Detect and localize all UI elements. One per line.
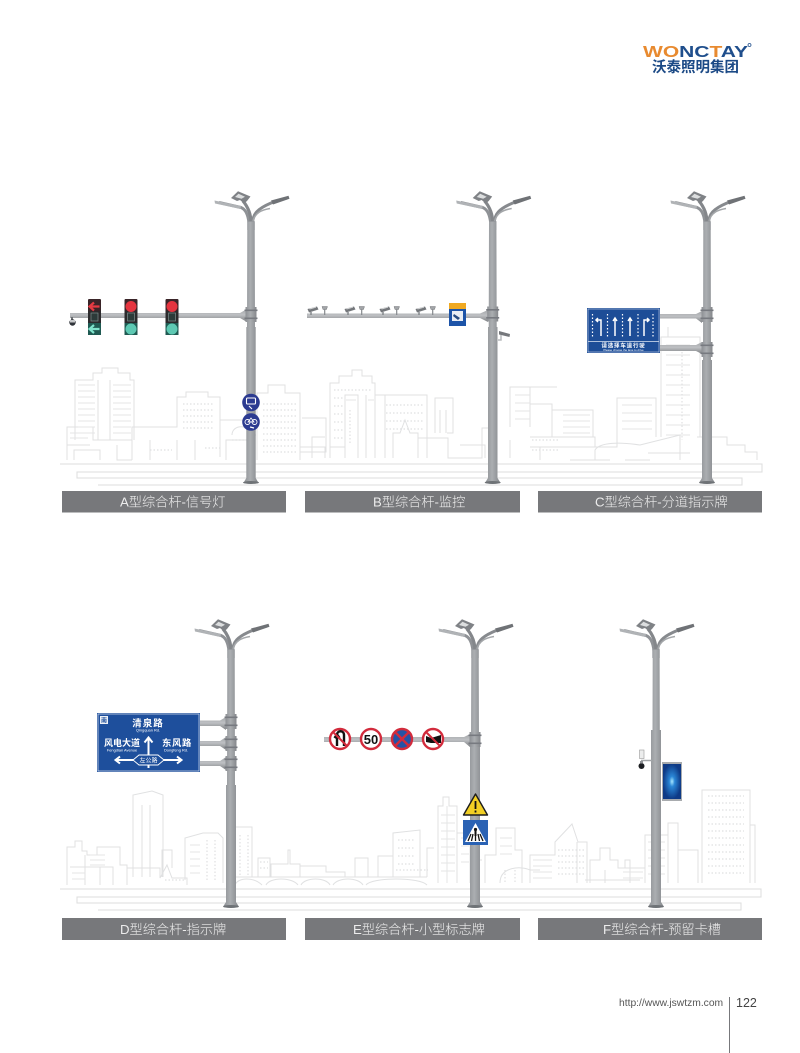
lamp head D [194, 619, 270, 658]
registered mark [748, 44, 751, 46]
collars C [700, 307, 714, 357]
cross arm A [70, 309, 247, 322]
sign caption English: Please choose the lane to drive [603, 348, 644, 352]
collar A [244, 307, 258, 322]
collar E [468, 732, 482, 747]
speed limit 50 sign: 50 [364, 732, 378, 747]
base B [485, 481, 501, 484]
base C [699, 481, 715, 484]
pole E [468, 650, 482, 906]
lamp head B [456, 191, 531, 230]
logo wordmark: WO NC TAY [643, 44, 748, 61]
road lines row 1 [60, 464, 762, 485]
road direction sign [97, 713, 200, 772]
bicycle lane sign [242, 413, 260, 431]
logo Chinese name: 沃泰照明集团 [652, 58, 739, 76]
pedestrian crossing sign [463, 820, 488, 845]
page number: 122 [736, 996, 757, 1010]
signal light 1 [88, 299, 101, 335]
base A [243, 481, 259, 484]
pole C [700, 222, 714, 482]
warning triangle sign [464, 794, 488, 815]
city skyline row 1 [67, 327, 757, 460]
caption E: E型综合杆-小型标志牌 [353, 922, 485, 937]
lower arm C [660, 342, 702, 354]
caption C: C型综合杆-分道指示牌 [595, 494, 728, 510]
cameras on arm [308, 306, 436, 315]
cross road plate: 左公路 [139, 756, 158, 764]
road direction sign: Qingquan Rd. [136, 728, 160, 732]
cross arm B [307, 310, 488, 322]
panel F: reserved slot pole [620, 619, 694, 908]
road direction sign: Fengdian Avenue [107, 748, 137, 752]
road lines row 2 [60, 889, 761, 910]
panel D: direction sign pole [97, 619, 270, 908]
no honking sign [423, 729, 443, 749]
pole F [648, 650, 664, 906]
caption A: A型综合杆-信号灯 [120, 494, 226, 510]
LED screen [662, 762, 682, 801]
speed limit 50 sign [361, 729, 381, 749]
direction arrows [116, 738, 182, 768]
destination Dongfeng: 东风路 [162, 737, 192, 748]
no stopping sign [392, 729, 412, 749]
collars D [224, 714, 238, 771]
caption F [538, 918, 762, 940]
lamp head F [620, 619, 694, 658]
road direction sign: Dongfeng Rd. [164, 748, 188, 752]
caption E [305, 918, 520, 940]
destination Fengdian: 风电大道 [104, 737, 140, 748]
caption D [62, 918, 286, 940]
no U-turn sign [330, 729, 350, 749]
brand logo [643, 44, 751, 76]
caption F: F型综合杆-预留卡槽 [603, 922, 721, 937]
bus lane sign [242, 394, 260, 411]
sign caption Chinese: 请选择车道行驶 [601, 342, 646, 350]
upper arm C [660, 311, 702, 323]
city skyline row 2 [67, 790, 755, 885]
north marker: 南 [101, 716, 107, 724]
footer divider [728, 997, 730, 1053]
camera A [69, 317, 76, 326]
camera bracket [638, 750, 652, 769]
caption A [62, 491, 286, 512]
pole D [224, 650, 238, 906]
destination Qingquan: 清泉路 [132, 718, 164, 730]
caption B [305, 491, 520, 512]
pole side camera [498, 331, 510, 340]
caption D: D型综合杆-指示牌 [120, 922, 226, 937]
caption C [538, 491, 762, 512]
base F [648, 905, 664, 908]
footer website url: http://www.jswtzm.com [619, 998, 723, 1009]
panel B: monitoring pole [307, 191, 531, 484]
cross arm E [324, 734, 470, 747]
lamp head A [214, 191, 290, 230]
lane arrows [596, 318, 649, 336]
pole B [486, 222, 500, 482]
collar B [486, 306, 499, 322]
lamp head E [438, 619, 514, 658]
monitoring notice sign [449, 303, 466, 326]
base D [223, 905, 239, 908]
panel E: small sign pole [324, 619, 514, 908]
caption B: B型综合杆-监控 [373, 494, 465, 510]
panel A: traffic signal pole [69, 191, 290, 484]
base E [467, 905, 483, 908]
panel C: lane guidance sign pole [587, 191, 746, 484]
arms D [200, 717, 226, 770]
signal light 2 [124, 299, 138, 335]
signal light 3 [166, 299, 178, 335]
lamp head C [670, 191, 746, 230]
pole A [244, 222, 258, 482]
lane guidance sign [587, 308, 660, 353]
